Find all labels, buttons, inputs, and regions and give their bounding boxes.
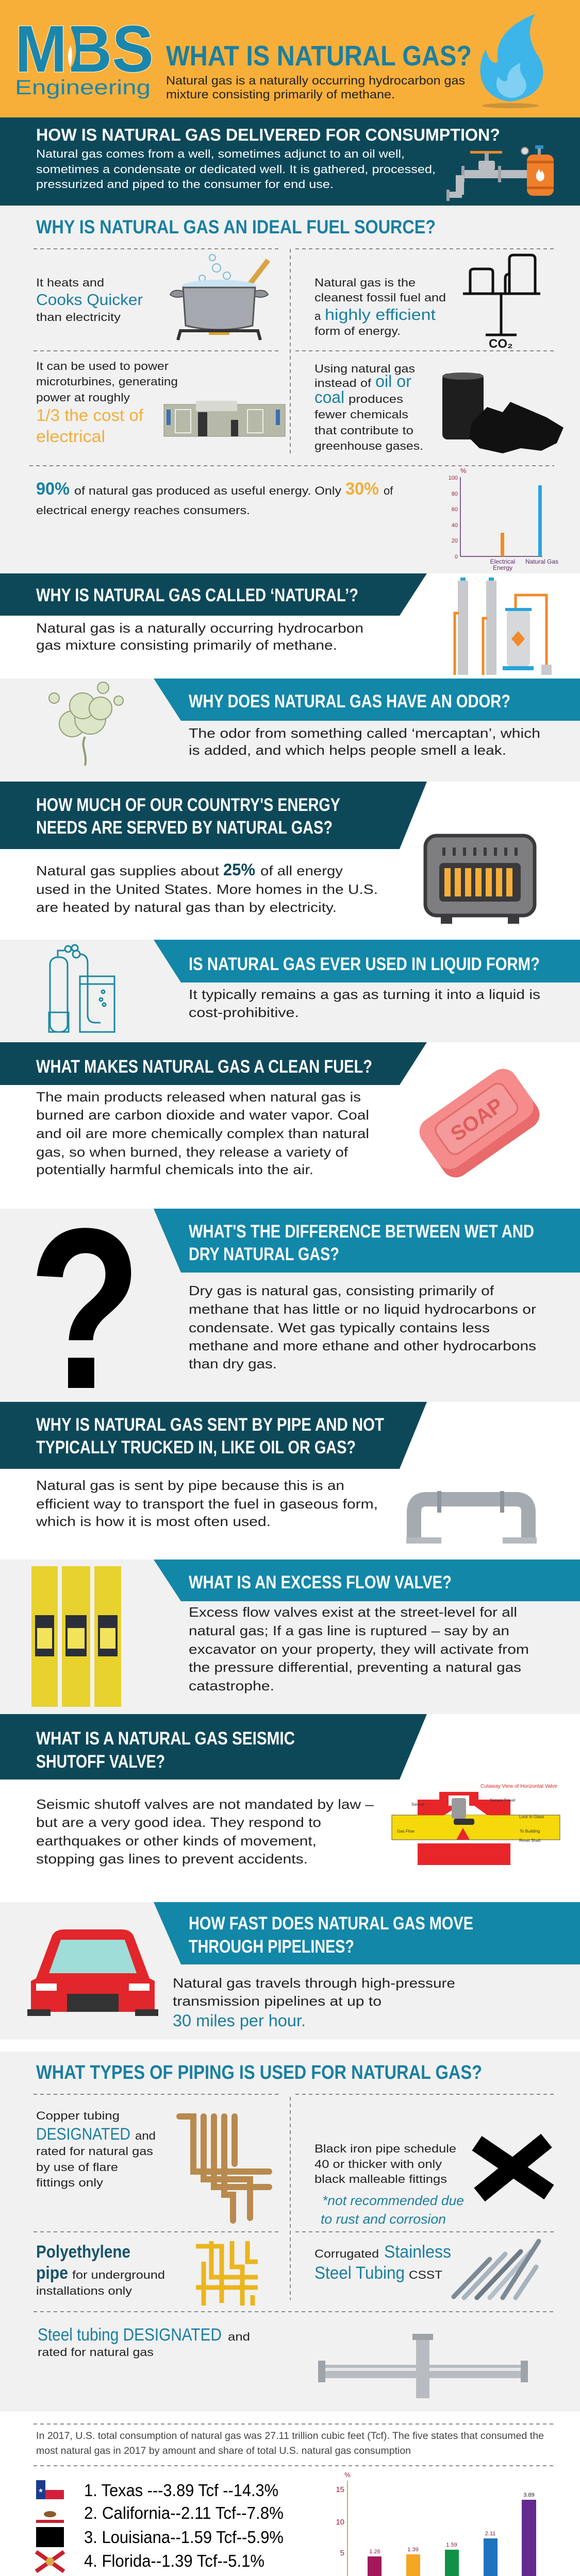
panel: odor: is added, and which helps people smell a leak. [189,742,506,758]
icon: soap [414,1063,545,1183]
cell: oil or coal [314,362,423,452]
chart: efficiency: 0 [455,554,458,560]
text: 90% efficiency: 90% [36,479,70,499]
icon: black iron X [477,2141,549,2195]
icon: soap: SOAP [446,1094,507,1146]
text: 90% efficiency: of [384,484,393,497]
panel: pipeline speed: HOW FAST DOES NATURAL GAS MOVE [189,1913,473,1934]
panel: odor: WHY DOES NATURAL GAS HAVE AN ODOR? [189,691,510,711]
text: 90% efficiency [36,479,393,517]
icon: CO2 factory [463,255,540,351]
panel: excess flow valve: catastrophe. [189,1678,274,1693]
panel: wet vs dry: methane that has little or no liquid hydrocarbons or [189,1301,536,1317]
panel: wet vs dry: Dry gas is natural gas, consisting primarily of [189,1283,494,1298]
chart: efficiency: 40 [452,522,458,529]
cell: black iron pipe: 40 or thicker with only [314,2158,442,2171]
panel: seismic shutoff: SHUTOFF VALVE? [36,1752,165,1772]
diagram: valve cutaway: Sensor Travel [490,1798,516,1803]
cell: cooks quicker: Cooks Quicker [36,291,143,309]
cell: highly efficient: a [314,310,321,323]
cell: oil or coal: produces [349,393,403,405]
panel: wet vs dry: methane and more ethane and other hydrocarbons [189,1338,536,1353]
chart: consumption by state: 1.26 [369,2549,380,2555]
cell: highly efficient: form of energy. [314,325,401,337]
heading: delivered [36,125,500,191]
panel: excess flow valve [154,1560,580,1693]
panel: energy share: used in the United States. More homes in the U.S. [36,882,378,897]
chart: efficiency: Electrical [490,558,515,565]
panel: excess flow valve: Excess flow valves exist at the street-level for all [189,1604,517,1620]
cell: steel tubing: and [228,2330,250,2343]
chart: consumption by state: 3.89 [523,2492,535,2498]
cell: oil or coal: Using natural gas [314,362,415,375]
heading: delivered: pressurized and piped to the consumer for end use. [36,178,334,191]
panel: why pipe [0,1402,427,1529]
panel: odor: The odor from something called ‘mercaptan’, which [189,725,540,741]
title: mixture consisting primarily of methane. [166,88,395,101]
list: top consuming states: 3. Louisiana--1.59 Tcf--5.9% [84,2528,284,2547]
cell: polyethylene: for underground [72,2268,165,2281]
diagram: valve cutaway: To Building [520,1829,540,1834]
cell: copper tubing: fittings only [36,2176,103,2189]
chart: efficiency: Natural Gas [525,558,558,565]
text: 90% efficiency: of natural gas produced as useful energy. Only [74,484,341,497]
chart: consumption by state [336,2471,540,2576]
panel: why pipe: Natural gas is sent by pipe because this is an [36,1478,344,1493]
diagram: valve cutaway: Lock In Glass [519,1815,544,1819]
panel: why pipe: efficient way to transport the fuel in gaseous form, [36,1496,378,1512]
icon: gas cylinder and glass [49,945,114,1032]
cell: copper tubing [36,2109,156,2189]
panel: energy share: 25% [223,860,255,879]
list: top consuming states: 2. California--2.11 Tcf--7.8% [84,2503,284,2522]
cell: CSST: Stainless [384,2242,451,2262]
panel: pipeline speed: 30 miles per hour. [173,2011,306,2030]
panel: energy share: NEEDS ARE SERVED BY NATURAL GAS? [36,818,333,838]
chart: consumption by state: % [344,2471,351,2479]
panel: why pipe: WHY IS NATURAL GAS SENT BY PIPE AND NOT [36,1415,384,1435]
panel: why pipe: which is how it is most often used. [36,1514,271,1529]
cell: oil or coal: coal [314,388,344,406]
chart: consumption by state: 5 [340,2549,344,2557]
chart: consumption by state: 15 [336,2485,344,2494]
panel: excess flow valve: WHAT IS AN EXCESS FLOW VALVE? [189,1572,452,1592]
diagram: valve cutaway [392,1784,560,1865]
icon: odor cloud [49,682,123,766]
panel: pipeline speed: THROUGH PIPELINES? [189,1937,354,1957]
panel: excess flow valve: the pressure differential, preventing a natural gas [189,1659,521,1675]
list: top consuming states: 1. Texas ---3.89 Tcf --14.3% [84,2481,278,2500]
heading: delivered: HOW IS NATURAL GAS DELIVERED FOR CONSUMPTION? [36,125,500,144]
cell: microturbines: microturbines, generating [36,375,178,388]
logo: Engineering [15,76,151,99]
cell: copper tubing: Copper tubing [36,2109,120,2122]
cell: CSST [314,2242,451,2283]
chart: efficiency: 100 [449,475,458,481]
cell: polyethylene: installations only [36,2284,132,2297]
icon: pipe and tank [446,145,554,201]
cell: black iron pipe [314,2142,464,2227]
cell: microturbines: power at roughly [36,391,130,404]
panel: odor [154,679,580,758]
cell: black iron pipe: black malleable fittings [314,2173,447,2185]
cell: copper tubing: and [135,2129,156,2142]
icon: question mark: ? [28,1181,142,1437]
chart: efficiency: % [460,467,467,474]
panel: energy share: HOW MUCH OF OUR COUNTRY'S ENERGY [36,795,340,815]
panel: pipeline speed: transmission pipelines at up to [173,1993,382,2009]
panel: seismic shutoff: WHAT IS A NATURAL GAS SEISMIC [36,1728,295,1749]
panel: why called natural [0,573,427,653]
cell: oil or coal: oil or [375,372,411,391]
panel: clean fuel: WHAT MAKES NATURAL GAS A CLEAN FUEL? [36,1057,372,1077]
list: top consuming states [36,2480,308,2576]
panel: why called natural: Natural gas is a naturally occurring hydrocarbon [36,620,363,636]
cell: steel tubing: rated for natural gas [38,2346,154,2359]
panel: pipeline speed [154,1902,580,2030]
icon: gas plant towers [455,578,552,675]
panel: energy share: Natural gas supplies about [36,863,220,878]
list: top consuming states: ★ [38,2487,43,2494]
diagram: valve cutaway: Gas Flow [397,1829,415,1834]
cell: copper tubing: by use of flare [36,2161,118,2174]
panel: excess flow valve: excavator on your property, they will activate from [189,1641,529,1657]
diagram: valve cutaway: Reset Shaft [519,1838,541,1843]
cell: black iron pipe: to rust and corrosion [321,2211,446,2227]
panel: why called natural: gas mixture consisting primarily of methane. [36,637,337,653]
chart: consumption by state: 2.11 [485,2531,495,2537]
cell: copper tubing: rated for natural gas [36,2145,153,2158]
cell: highly efficient: cleanest fossil fuel and [314,291,446,304]
panel: wet vs dry [154,1209,580,1371]
cell: microturbines: 1/3 the cost of [36,406,143,425]
text: consumption intro: In 2017, U.S. total consumption of natural gas was 27.11 trillion cubic feet (Tcf). The five states that consumed the [36,2431,544,2442]
cell: cooks quicker [36,276,143,324]
icon: CO2 factory: CO₂ [489,337,513,351]
cell: oil or coal: that contribute to [314,424,413,437]
panel: clean fuel [0,1042,427,1177]
cell: cooks quicker: than electricity [36,311,121,324]
heading: delivered: sometimes a condensate or dedicated well. It is gathered, processed, [36,163,436,176]
panel: pipeline speed: Natural gas travels through high-pressure [173,1975,455,1991]
text: 90% efficiency: 30% [345,479,379,499]
panel: why pipe: TYPICALLY TRUCKED IN, LIKE OIL OR GAS? [36,1437,356,1458]
chart: efficiency: 60 [452,506,458,513]
panel: seismic shutoff: Seismic shutoff valves are not mandated by law – [36,1797,374,1812]
panel: seismic shutoff: but are a very good idea. They respond to [36,1815,321,1830]
icon: yellow valves [31,1566,121,1707]
icon: cooking pot [170,255,268,340]
panel: liquid form [154,940,580,1020]
text: consumption intro: most natural gas in 2017 by amount and share of total U.S. natural gas consumption [36,2446,411,2456]
title [166,40,472,101]
icon: stainless tubes [454,2241,539,2298]
panel: energy share: of all energy [260,863,343,878]
text: 90% efficiency: electrical energy reaches consumers. [36,504,250,517]
cell: oil or coal: fewer chemicals [314,408,408,421]
chart: consumption by state: 1.39 [407,2547,419,2553]
panel: seismic shutoff [0,1714,427,1867]
panel: why called natural: WHY IS NATURAL GAS CALLED ‘NATURAL’? [36,585,358,605]
diagram: valve cutaway: Cutaway View of Horizontal Valve [480,1784,558,1789]
title: WHAT IS NATURAL GAS? [166,40,472,72]
cell: polyethylene: Polyethylene [36,2242,130,2262]
panel: wet vs dry: condensate. Wet gas typically contains less [189,1320,490,1335]
cell: CSST: Corrugated [314,2247,379,2260]
cell: polyethylene [36,2242,165,2297]
heading: piping types: WHAT TYPES OF PIPING IS USED FOR NATURAL GAS? [36,2062,482,2083]
chart: consumption by state: 10 [336,2518,344,2527]
diagram: valve cutaway: Sensor [411,1802,425,1807]
panel: clean fuel: and oil are more chemically complex than natural [36,1126,369,1141]
cell: copper tubing: DESIGNATED [36,2125,130,2143]
chart: efficiency [449,467,558,571]
icon: gas heater [425,836,535,924]
logo: MBS [15,12,154,86]
cell: cooks quicker: It heats and [36,276,104,289]
chart: efficiency: 20 [452,538,458,544]
panel: energy share [0,782,427,915]
cell: microturbines: electrical [36,427,105,446]
cell: highly efficient: Natural gas is the [314,276,416,289]
heading: delivered: Natural gas comes from a well, sometimes adjunct to an oil well, [36,147,405,160]
chart: efficiency: 80 [452,491,458,497]
text: consumption intro [36,2431,544,2456]
icon: copper pipes [179,2116,269,2221]
icon: pipe bend [406,1491,537,1544]
cell: CSST: Steel Tubing [314,2263,405,2283]
cell: steel tubing [38,2325,250,2359]
panel: clean fuel: gas, so when burned, they release a variety of [36,1144,349,1160]
panel: energy share: are heated by natural gas than by electricity. [36,900,337,915]
panel: liquid form: cost-prohibitive. [189,1005,299,1020]
icon: yellow pipes [196,2241,258,2306]
panel: excess flow valve: natural gas; If a gas line is ruptured – say by an [189,1623,509,1638]
chart: consumption by state: 1.59 [446,2542,457,2548]
heading: ideal fuel source: WHY IS NATURAL GAS AN IDEAL FUEL SOURCE? [36,216,436,238]
panel: wet vs dry: DRY NATURAL GAS? [189,1244,339,1264]
panel: seismic shutoff: stopping gas lines to prevent accidents. [36,1851,308,1867]
icon: flame [480,14,543,108]
icon: oil barrel and coal [442,372,564,453]
cell: microturbines [36,360,178,446]
panel: liquid form: It typically remains a gas as turning it into a liquid is [189,987,540,1002]
icon: red car [27,1929,158,2016]
cell: CSST: CSST [409,2268,442,2281]
panel: clean fuel: The main products released when natural gas is [36,1089,361,1105]
cell: oil or coal: greenhouse gases. [314,439,423,452]
cell: steel tubing: Steel tubing DESIGNATED [38,2325,222,2345]
icon: microturbine generator [164,401,285,436]
list: top consuming states: 4. Florida--1.39 Tcf--5.1% [84,2551,264,2570]
panel: wet vs dry: than dry gas. [189,1356,277,1371]
icon: steel tee pipe [318,2334,528,2398]
cell: black iron pipe: Black iron pipe schedule [314,2142,456,2155]
cell: black iron pipe: *not recommended due [322,2193,464,2208]
cell: microturbines: It can be used to power [36,360,169,372]
cell: oil or coal: instead of [314,377,372,389]
title: Natural gas is a naturally occurring hydrocarbon gas [166,74,465,87]
cell: polyethylene: pipe [36,2263,68,2283]
cell: highly efficient: highly efficient [325,306,436,324]
panel: seismic shutoff: earthquakes or other kinds of movement, [36,1833,317,1849]
cell: highly efficient [314,276,446,337]
panel: clean fuel: potentially harmful chemicals into the air. [36,1162,313,1177]
panel: clean fuel: burned are carbon dioxide and water vapor. Coal [36,1107,369,1123]
chart: efficiency: Energy [493,564,512,571]
